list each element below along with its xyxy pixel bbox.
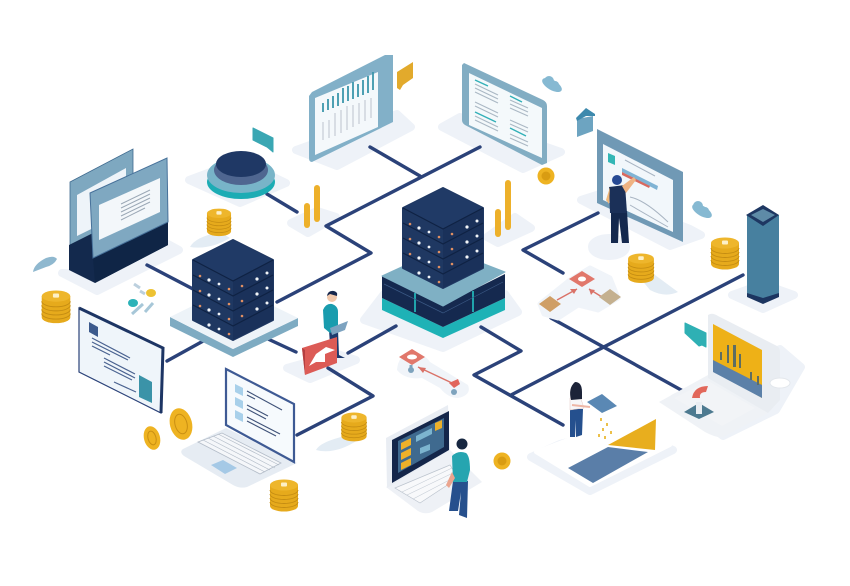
document stand, top left: [69, 149, 168, 283]
cloud left: [33, 257, 57, 272]
gold coin bottom: [494, 452, 510, 470]
laptop, bottom right: [659, 314, 790, 437]
loose gold coins: [141, 406, 196, 452]
joystick: [684, 386, 714, 419]
orange chat bubble: [397, 62, 413, 90]
woman with tablet: [570, 382, 617, 439]
small house box: [576, 108, 595, 137]
small shapes near server: [128, 284, 156, 314]
flow diagram, upper: [539, 268, 621, 318]
presentation monitor: [597, 129, 683, 242]
person at bottom laptop: [446, 438, 470, 518]
flow diagram, lower: [397, 349, 469, 398]
left server platform: [170, 286, 298, 357]
chart monitor, top: [309, 55, 393, 162]
central server: [403, 188, 483, 288]
teal chat bubble right: [685, 323, 706, 347]
laptop, bottom left: [181, 369, 297, 488]
connector lines: [147, 147, 743, 435]
laptop, bottom centre: [386, 405, 482, 513]
central server platform: [382, 248, 505, 338]
round button device: [207, 151, 275, 199]
cloud, top right: [540, 75, 564, 95]
coin stacks right: [628, 238, 739, 283]
gold coin: [538, 168, 554, 184]
teal chat bubble: [253, 128, 273, 152]
person with laptop and red box: [302, 291, 348, 375]
bar pair right: [495, 180, 511, 237]
coin stack: [207, 209, 231, 236]
bar pair left: [304, 185, 320, 228]
report monitor, top: [462, 63, 547, 165]
document panel, left: [79, 308, 163, 413]
person at monitor: [606, 175, 636, 243]
pillar: [746, 205, 779, 304]
data platform, bottom right: [536, 419, 670, 485]
background shadows: [62, 114, 801, 491]
coin stacks bottom: [270, 413, 367, 512]
cloud right: [690, 201, 714, 221]
left server: [193, 240, 273, 340]
coin stack left: [42, 290, 70, 323]
